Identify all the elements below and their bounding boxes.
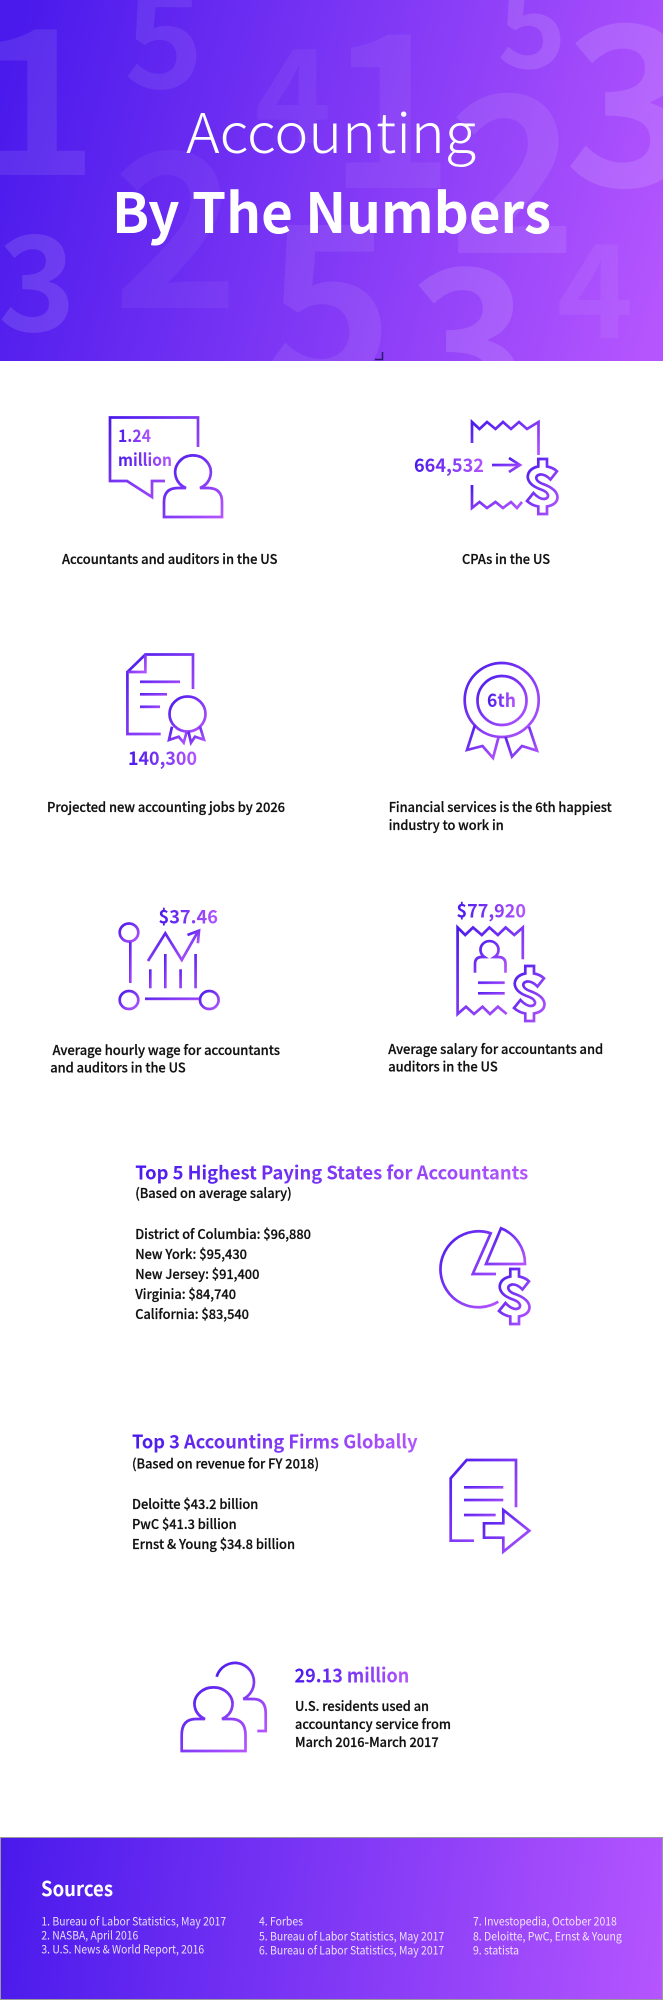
icon: receipt with dollar <box>472 422 558 514</box>
number: 140,300: 140,300 <box>128 745 197 771</box>
stat: hourly wage <box>50 904 280 1077</box>
list of firms: PwC $41.3 billion <box>132 1513 237 1533</box>
caption: Average hourly wage for accountants <box>52 1039 280 1059</box>
list of states: New Jersey: $91,400 <box>135 1263 259 1283</box>
source column 1 <box>41 1914 226 1958</box>
source column 1: 3. U.S. News & World Report, 2016 <box>41 1942 204 1958</box>
subheading: (Based on average salary) <box>135 1182 292 1202</box>
header banner: 4 <box>557 188 633 376</box>
caption line 2: auditors in the US <box>388 1056 498 1076</box>
panel: accountancy service users <box>182 1659 451 1751</box>
stat: projected jobs <box>47 654 285 816</box>
caption line 2: industry to work in <box>389 814 504 834</box>
source column 1: 2. NASBA, April 2016 <box>41 1928 138 1944</box>
number: $37.46: $37.46 <box>158 904 218 930</box>
title line 1: Accounting <box>186 89 476 169</box>
list of firms: Ernst & Young $34.8 billion <box>132 1533 295 1553</box>
list of states: District of Columbia: $96,880 <box>135 1223 311 1243</box>
stat: accountants and auditors <box>62 418 278 568</box>
source column 2: 6. Bureau of Labor Statistics, May 2017 <box>259 1943 444 1959</box>
caption: Accountants and auditors in the US <box>62 548 278 568</box>
stat: average salary <box>388 898 603 1076</box>
header banner: 3 <box>0 179 76 370</box>
icon: medal <box>465 663 539 758</box>
source column 3 <box>473 1914 622 1959</box>
icon: certificate document <box>127 654 206 743</box>
list of states: New York: $95,430 <box>135 1243 247 1263</box>
header banner: 3 <box>409 180 529 477</box>
stat: CPAs <box>414 422 558 568</box>
number: $77,920: $77,920 <box>456 898 526 924</box>
heading: sources: Sources <box>41 1873 113 1902</box>
icon: two people <box>182 1663 266 1751</box>
caption: Financial services is the 6th happiest <box>389 796 612 816</box>
icon: payslip with dollar <box>458 928 544 1021</box>
caption: Average salary for accountants and <box>388 1038 603 1058</box>
caption: CPAs in the US <box>462 548 550 568</box>
source column 3: 9. statista <box>473 1943 519 1959</box>
source column 2 <box>259 1914 444 1959</box>
source column 3: 7. Investopedia, October 2018 <box>473 1914 617 1930</box>
heading: Top 3 Accounting Firms Globally <box>132 1427 418 1454</box>
caption line 2: and auditors in the US <box>50 1057 186 1077</box>
source column 1: 1. Bureau of Labor Statistics, May 2017 <box>41 1914 226 1930</box>
list of firms: Deloitte $43.2 billion <box>132 1493 258 1513</box>
caption: Projected new accounting jobs by 2026 <box>47 796 285 816</box>
number: 664,532: 664,532 <box>414 452 484 478</box>
panel: top 5 highest paying states <box>134 1158 530 1324</box>
list of states: California: $83,540 <box>135 1303 249 1323</box>
number: 1.24: 1.24 <box>118 422 151 447</box>
list of firms <box>132 1493 295 1553</box>
description: March 2016-March 2017 <box>295 1731 439 1751</box>
heading: Top 5 Highest Paying States for Accountants <box>135 1158 528 1185</box>
description: accountancy service from <box>295 1713 451 1733</box>
icon: speech bubble with person <box>110 418 222 517</box>
source column 3: 8. Deloitte, PwC, Ernst & Young <box>473 1929 622 1945</box>
header banner: 2 <box>449 0 577 316</box>
subheading: (Based on revenue for FY 2018) <box>132 1452 319 1472</box>
title line 2: By The Numbers <box>112 169 551 249</box>
stat: happiest industry <box>389 663 612 834</box>
panel: top 3 accounting firms <box>132 1427 529 1553</box>
list of states <box>134 1223 311 1323</box>
header banner: 2 <box>113 59 239 370</box>
icon: pie chart with dollar <box>440 1228 530 1324</box>
number: 29.13 million: 29.13 million <box>294 1659 409 1688</box>
list of states: Virginia: $84,740 <box>134 1283 236 1303</box>
number: 6th: 6th <box>487 687 516 713</box>
source column 2: 4. Forbes <box>259 1914 303 1930</box>
icon: document with arrow <box>451 1460 529 1552</box>
header banner <box>0 0 663 361</box>
source column 2: 5. Bureau of Labor Statistics, May 2017 <box>259 1929 444 1945</box>
panel: sources footer <box>0 1838 662 2000</box>
description: U.S. residents used an <box>295 1695 429 1715</box>
description <box>295 1695 451 1751</box>
number: million: million <box>118 446 172 471</box>
header banner: 5 <box>265 129 393 445</box>
icon: line chart <box>120 924 219 1009</box>
